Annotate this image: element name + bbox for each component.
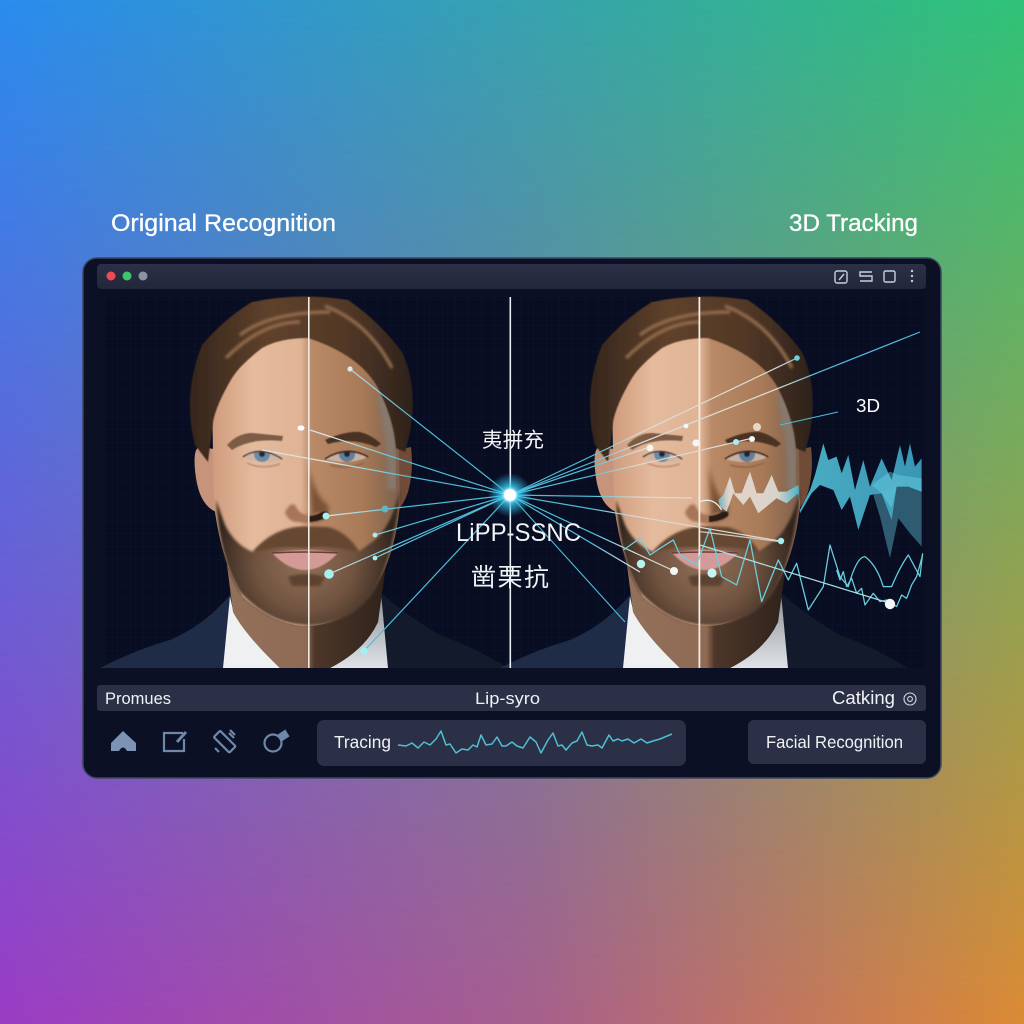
status label: Lip-syro: Lip-syro <box>475 689 540 708</box>
tracking line to collar <box>364 495 510 651</box>
tracking lines: right <box>510 332 920 572</box>
tracking line to collar and 3D <box>510 412 838 622</box>
status label: Catking: Catking <box>832 687 895 708</box>
thick waveform <box>718 443 922 558</box>
central glow node <box>488 473 532 517</box>
heading: Original Recognition: Original Recognition <box>111 210 336 237</box>
infographic canvas <box>82 213 942 779</box>
tracking points: left <box>298 366 388 655</box>
status icon <box>904 693 916 705</box>
center divider <box>510 297 511 668</box>
status label: Promues: Promues <box>105 689 171 708</box>
icon: tool <box>214 730 236 753</box>
icon: target <box>264 731 288 752</box>
window dots <box>106 272 148 280</box>
button: Facial Recognition: Facial Recognition <box>766 732 903 752</box>
left face divider <box>308 297 310 668</box>
icon: edit <box>164 732 186 751</box>
tracking points: right <box>637 355 895 609</box>
icon: home <box>111 731 136 751</box>
thin waveforms <box>623 500 923 610</box>
status bar <box>97 685 926 711</box>
right portrait <box>500 296 908 668</box>
title bar <box>97 264 926 289</box>
button: Facial Recognition <box>748 720 926 764</box>
panel: app window <box>83 258 941 778</box>
right face divider <box>698 297 700 668</box>
toolbar icons <box>835 270 913 283</box>
tracing sparkline <box>398 731 672 753</box>
tracing panel <box>317 720 686 766</box>
left portrait <box>100 296 508 668</box>
heading: 3D Tracking: 3D Tracking <box>789 210 918 237</box>
center label top: 夷拼充 <box>482 429 544 452</box>
tracing label: Tracing <box>334 732 391 752</box>
center label bottom: 凿栗抗 <box>471 564 549 592</box>
label: 3D: 3D <box>856 396 880 416</box>
tracking lines: left <box>262 369 510 574</box>
comparison stage <box>100 296 925 668</box>
center label middle: LiPP-SSNC <box>456 519 581 547</box>
